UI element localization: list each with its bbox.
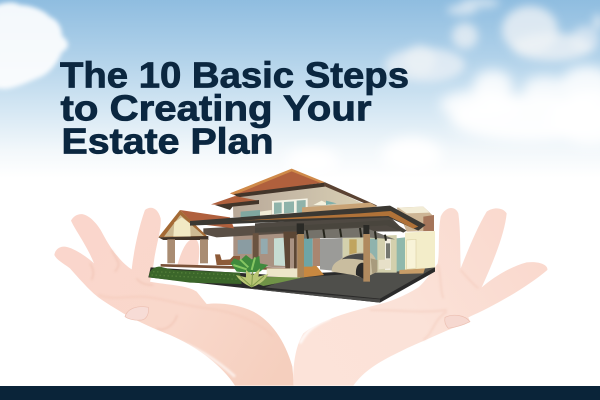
pergola roof [190,206,426,241]
columns [253,232,304,277]
thumb nail [125,307,149,320]
house on platform [148,169,435,303]
second floor wall [233,185,373,219]
title: The 10 Basic Steps [60,54,409,96]
thumb nail [445,315,470,328]
clouds: lower right [286,66,600,176]
patio ceiling beams [203,223,300,237]
title: to Creating Your [60,88,371,128]
ground platform [148,267,435,303]
palm shading [370,265,478,340]
small upper-left roof [211,196,259,210]
garden plants [231,255,268,287]
car [332,252,378,279]
cloud: top left [0,2,68,89]
front column [363,234,370,282]
ground floor wall [233,229,320,268]
right annex [396,207,435,274]
carport wall [320,235,397,273]
hedge [149,267,242,284]
right hand [293,208,547,386]
sky background [0,0,600,178]
upper main roof [230,169,377,207]
left gable [158,210,234,263]
deck and planter [161,264,324,278]
tan parapet [302,203,377,213]
clouds: top right [385,0,600,82]
title [60,54,409,162]
bottom bar [0,386,600,400]
left hand [54,208,294,386]
patio furniture [215,254,240,265]
title: Estate Plan [62,120,274,162]
palm and finger shading [98,295,273,337]
index finger behind house [177,239,199,267]
